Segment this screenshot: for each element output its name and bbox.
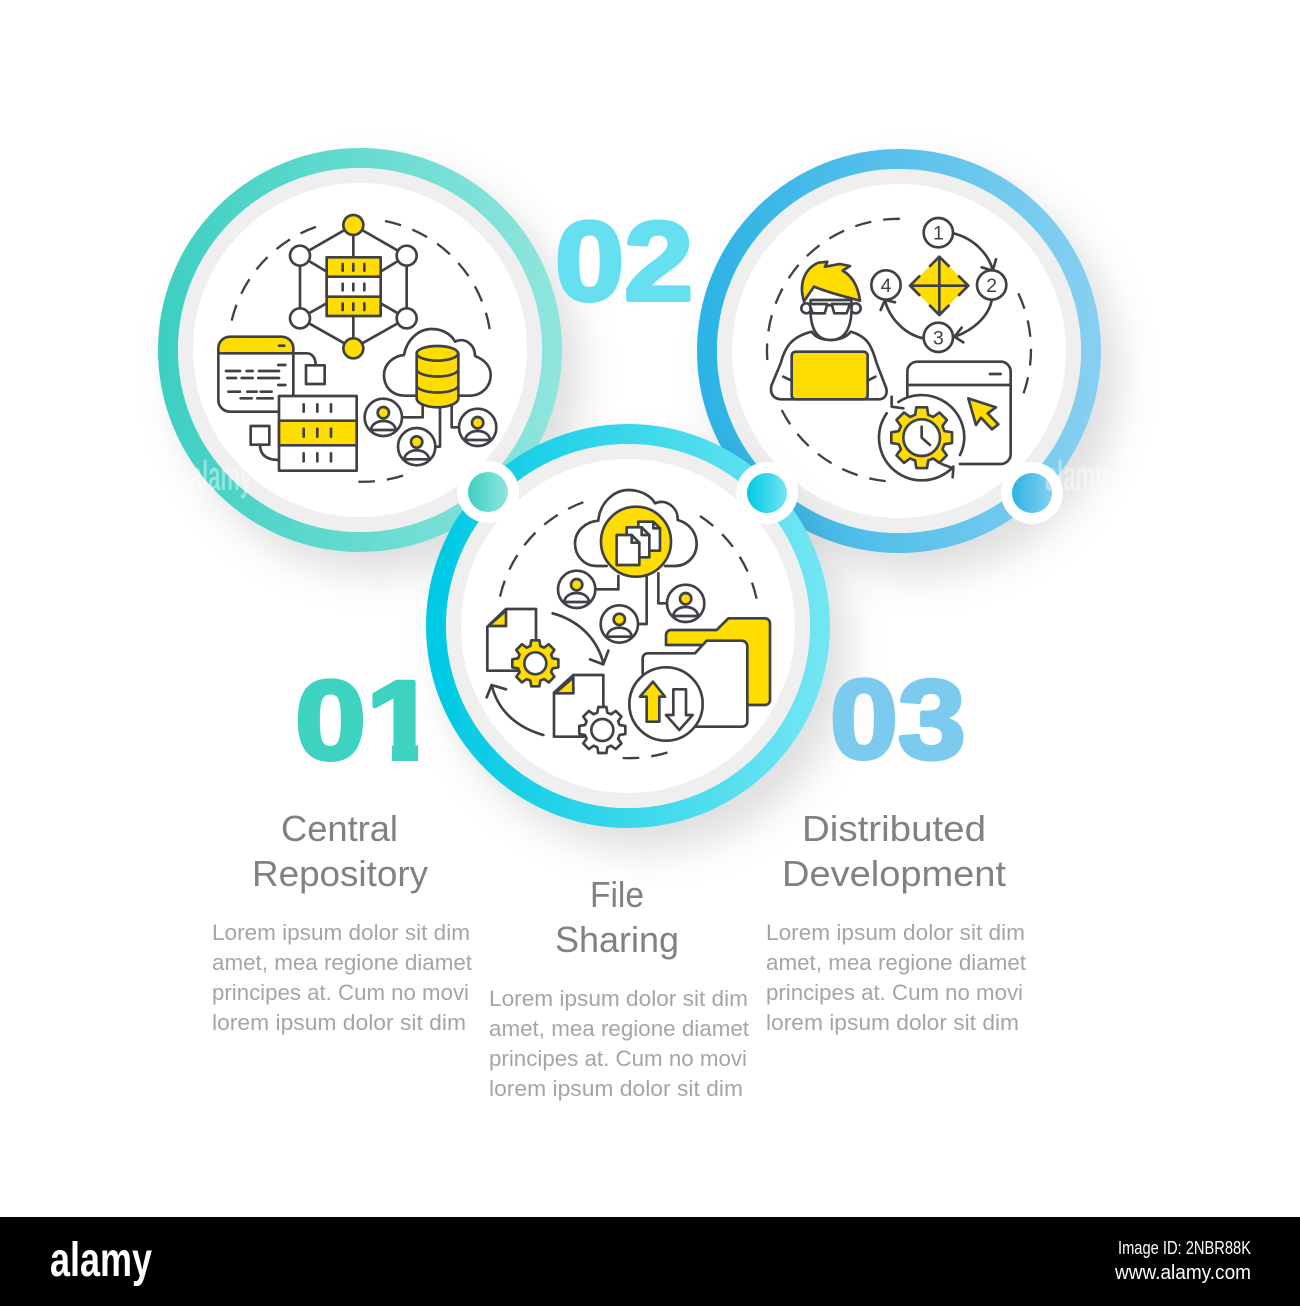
heading: distributed development: Distributed: [802, 808, 986, 849]
text block: distributed development: lorem ipsum dolor sit dim: [766, 1010, 1019, 1035]
text block: distributed development: principes at. Cum no movi: [766, 980, 1023, 1005]
heading: file sharing: File: [590, 874, 644, 915]
heading: central repository: Central: [281, 808, 398, 849]
footer bar: [0, 1217, 1300, 1306]
connector dot 1: [457, 461, 519, 523]
footer logo: alamy: [50, 1234, 152, 1287]
icon: distributed development: 3: [933, 328, 944, 349]
panel: step 2 circle: [707, 159, 1091, 543]
watermark left: alamy: [190, 452, 252, 499]
heading: distributed development: [782, 808, 1006, 894]
watermark right: alamy: [1045, 452, 1107, 499]
text block: central repository: Lorem ipsum dolor sit dim: [212, 920, 470, 945]
heading: file sharing: [555, 874, 679, 960]
icon: central repository: [218, 215, 496, 482]
number 03: 03: [830, 657, 966, 782]
text block: file sharing: lorem ipsum dolor sit dim: [489, 1076, 743, 1101]
panel: step 1 circle: [168, 158, 552, 542]
icon: distributed development: [767, 218, 1031, 482]
footer url: www.alamy.com: [1114, 1262, 1251, 1284]
text block: file sharing: amet, mea regione diamet: [489, 1016, 749, 1041]
heading: distributed development: Development: [782, 853, 1006, 894]
number 02: 02: [555, 200, 693, 325]
text block: file sharing: principes at. Cum no movi: [489, 1046, 747, 1071]
connector dot 3: [1001, 462, 1063, 524]
heading: file sharing: Sharing: [555, 919, 679, 960]
text block: central repository: amet, mea regione diamet: [212, 950, 472, 975]
text block: central repository: lorem ipsum dolor sit dim: [212, 1010, 466, 1035]
text block: central repository: [212, 920, 472, 1035]
footer image id: Image ID: 2NBR88K: [1118, 1238, 1251, 1258]
icon: distributed development: 1: [933, 224, 944, 245]
text block: file sharing: Lorem ipsum dolor sit dim: [489, 986, 748, 1011]
text block: central repository: principes at. Cum no movi: [212, 980, 469, 1005]
icon: file sharing: [487, 490, 770, 758]
number 01: 01: [295, 658, 437, 783]
text block: file sharing: [489, 986, 749, 1101]
text block: distributed development: [766, 920, 1026, 1035]
text block: distributed development: Lorem ipsum dolor sit dim: [766, 920, 1025, 945]
icon: distributed development: 4: [881, 276, 892, 297]
heading: central repository: [252, 808, 428, 894]
heading: central repository: Repository: [252, 853, 428, 894]
text block: distributed development: amet, mea regione diamet: [766, 950, 1026, 975]
icon: distributed development: 2: [986, 276, 997, 297]
panel: step 3 circle: [436, 434, 820, 818]
connector dot 2: [736, 462, 798, 524]
